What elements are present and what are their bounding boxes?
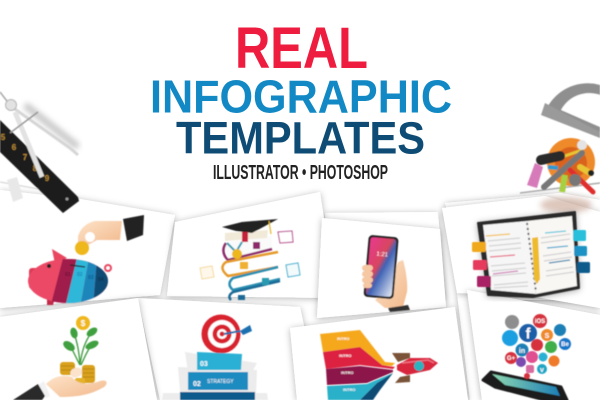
sheet: target	[138, 298, 320, 400]
sheet: notebook	[442, 196, 600, 308]
illustration: notebook	[472, 212, 590, 297]
sheet: behind notebook	[445, 193, 600, 300]
icon: viber	[516, 357, 526, 367]
icon: smartphone lying flat	[483, 372, 567, 400]
icon: coin and chevron	[227, 242, 242, 259]
icon: vimeo	[554, 324, 566, 336]
icon: black ruler: 6	[12, 143, 17, 152]
illustration: rocket arrow	[320, 330, 438, 400]
icon: black ruler: 9	[45, 174, 50, 183]
icon: flickr	[526, 365, 534, 373]
band: teal: INTRO	[343, 387, 355, 392]
title: infographic: INFOGRAPHIC	[150, 70, 452, 122]
icon: whatsapp	[545, 341, 557, 353]
icon: soundcloud	[548, 356, 560, 366]
icon: book stack	[222, 236, 280, 300]
sheet: phone	[317, 218, 446, 318]
icon: instagram	[526, 351, 538, 363]
icon: open hand	[46, 376, 107, 397]
icon: small tags	[200, 231, 300, 300]
stationery right	[520, 83, 600, 213]
icon: compass	[0, 92, 78, 177]
icon: pig body: 02	[77, 272, 83, 278]
stair step: 01	[180, 392, 255, 400]
title: real: REAL	[235, 16, 368, 81]
notebook pages	[483, 216, 577, 294]
notebook tabs	[472, 230, 590, 287]
title: templates: TEMPLATES	[176, 112, 425, 164]
title block	[150, 16, 452, 184]
icon: apple	[505, 315, 519, 329]
icon: plant: $	[81, 319, 86, 328]
sheet: behind phone	[325, 212, 445, 300]
icon: thumb	[69, 366, 83, 379]
illustration: target and stairs	[162, 314, 268, 400]
icon: twitter	[502, 330, 518, 346]
paper sheets	[0, 190, 600, 400]
icon: pig body: 01	[65, 272, 71, 278]
stationery left	[0, 92, 79, 213]
icon: linkedin: in	[519, 348, 525, 355]
icon: target	[202, 314, 252, 354]
sheet: graduation	[167, 192, 336, 298]
icon: rocket	[392, 353, 438, 383]
band: orange: INTRO	[337, 336, 349, 341]
stair step: 02 strategy: STRATEGY	[207, 379, 234, 385]
stair step: 03: 03	[200, 361, 208, 368]
icon: sleeve	[13, 384, 45, 400]
illustration: graduation books	[200, 219, 300, 300]
stair step: 02 strategy: 02	[193, 381, 201, 388]
icon: pig body: 04	[98, 277, 104, 283]
icon: mortarboard and diploma	[222, 219, 278, 242]
icon: facebook: f	[526, 326, 532, 342]
icon: black ruler: 8	[33, 164, 38, 173]
icon: black ruler	[0, 120, 79, 213]
icon: black ruler: 7	[23, 153, 28, 162]
illustration: social media	[483, 314, 571, 400]
icon: hand with coin	[75, 215, 144, 255]
icon: black ruler: 5	[1, 133, 6, 142]
icon: youtube	[531, 339, 543, 351]
notebook cover	[478, 212, 579, 297]
icon: skype	[538, 352, 548, 362]
icon: phone: 1:21	[376, 252, 389, 259]
band: maroon: INTRO	[341, 370, 353, 375]
icon: orange share: S	[545, 333, 550, 340]
icon: protractor	[541, 83, 600, 138]
stair step: 02 strategy	[188, 372, 248, 390]
icon: pencil cup	[520, 138, 600, 213]
icon: pig body	[28, 249, 115, 308]
band: red: INTRO	[339, 353, 351, 358]
icon: fingers	[362, 265, 373, 288]
icon: behance: Be	[561, 342, 569, 348]
illustration: money plant	[13, 316, 107, 400]
sheet: rocket	[290, 307, 468, 400]
icon cluster	[502, 314, 571, 374]
sheet: social	[467, 290, 600, 400]
icon: gold coins	[60, 362, 95, 385]
illustration: smartphone in hand	[362, 235, 410, 312]
icon: pig body: 03	[88, 275, 94, 281]
icon: cuff	[38, 381, 50, 398]
sheet: behind social	[457, 290, 490, 400]
icon: hand	[375, 260, 407, 308]
icon: google plus: G+	[507, 356, 516, 362]
subtitle: ILLUSTRATOR • PHOTOSHOP	[213, 162, 388, 184]
illustration: piggy bank	[28, 215, 144, 308]
sheet: piggy bank	[0, 190, 175, 308]
icon: pencil	[532, 237, 540, 284]
icon: set square	[0, 177, 78, 202]
icon: cuff	[388, 305, 410, 312]
icon: ios: iOS	[535, 319, 545, 325]
icon: vine: v	[540, 367, 544, 374]
sheet: plant	[0, 298, 157, 400]
icon: stair paper	[162, 352, 268, 400]
